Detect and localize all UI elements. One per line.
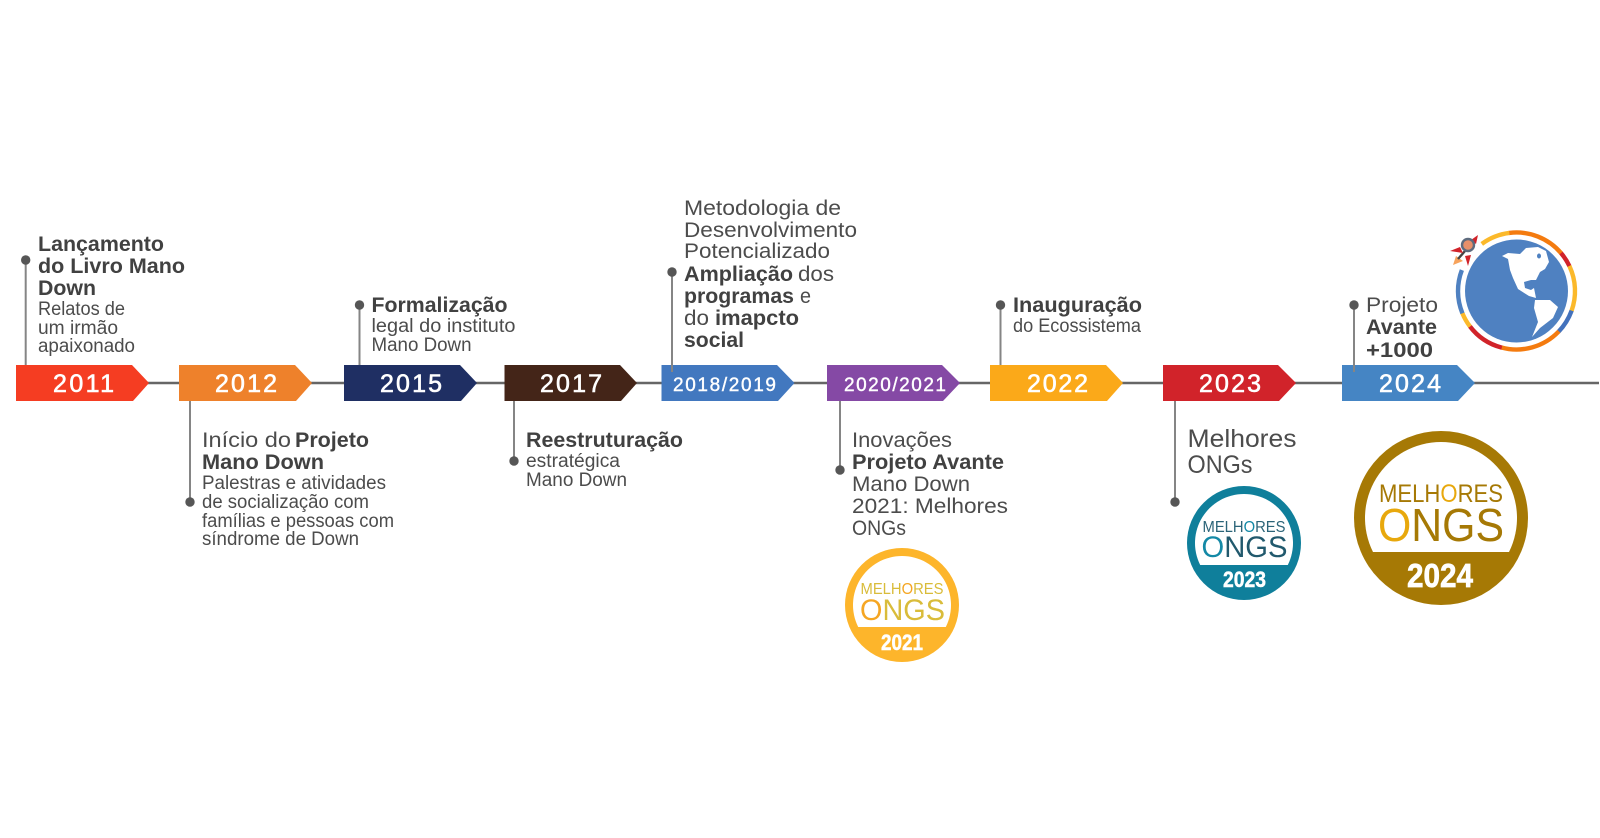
badge: Melhores ONGs 2021: ONGS [860,594,945,627]
panel: 2024 milestone [1342,208,1599,605]
text: inauguration: do Ecossistema [1013,316,1141,337]
text: methodology and expansion: programas [684,285,794,308]
text: innovations: Mano Down [852,473,970,496]
connector stem and dot [185,400,195,507]
text: Melhores ONGs: Melhores [1188,425,1296,453]
year arrow 2011 [16,365,149,401]
year arrow 2024 [1342,365,1475,401]
year arrow 2012 [179,365,312,401]
text: methodology and expansion: social [684,329,744,352]
year arrow 2015 [344,365,477,401]
badge: Melhores ONGs 2024: 2024 [1407,557,1474,594]
text: project start: Palestras e atividades [202,473,386,494]
connector stem and dot [21,255,30,366]
text: project start: Mano Down [202,451,324,474]
badge: Melhores ONGs 2024 [1354,431,1528,605]
badge: Melhores ONGs 2023 [1187,486,1301,600]
connector stem and dot [1349,300,1359,372]
text: inauguration: Inauguração [1013,294,1142,317]
text: project start: de socialização com [202,492,369,513]
text: methodology and expansion: imapcto [715,307,799,330]
text: methodology and expansion: Desenvolvimento [684,219,857,242]
text: book launch: do Livro Mano [38,255,185,278]
year arrow 2020/2021: 2020/2021 [844,375,946,396]
text: book launch: Lançamento [38,233,164,256]
text: formalization: legal do instituto [372,316,516,337]
year arrow 2023: 2023 [1199,370,1261,398]
text: innovations [852,429,1008,540]
badge: Melhores ONGs 2023: MELHORES [1202,519,1286,536]
text: project start: síndrome de Down [202,529,359,550]
text: restructuring: Mano Down [526,470,627,491]
text: restructuring: Reestruturação [526,429,683,452]
badge: Melhores ONGs 2021: 2021 [881,630,923,655]
text: methodology and expansion: do [684,307,709,330]
connector stem and dot [509,400,519,466]
connector stem and dot [1170,400,1180,507]
text: innovations: ONGs [852,517,906,540]
text: Projeto Avante +1000: Avante [1366,316,1437,339]
panel: 2011 milestone [16,233,185,401]
text: Projeto Avante +1000: +1000 [1366,339,1433,362]
year arrow 2011: 2011 [53,370,114,398]
year arrow 2017: 2017 [540,370,602,398]
badge: Melhores ONGs 2023: ONGS [1202,531,1288,564]
badge: Melhores ONGs 2021 [845,548,959,662]
panel: 2020/2021 milestone [827,365,1008,662]
text: innovations: 2021: Melhores [852,495,1008,518]
year arrow 2018/2019: 2018/2019 [673,375,776,396]
badge: Melhores ONGs 2024: ONGS [1378,499,1504,551]
panel: 2015 milestone [344,294,516,401]
text: project start [202,429,394,550]
text: Melhores ONGs: ONGs [1188,451,1252,479]
text: restructuring [526,429,683,491]
connector stem and dot [835,400,845,475]
text: project start: famílias e pessoas com [202,511,394,532]
text: formalization: Formalização [372,294,508,317]
text: Projeto Avante +1000: Projeto [1366,294,1438,317]
year arrow 2020/2021 [827,365,960,401]
year arrow 2023 [1163,365,1296,401]
panel: 2023 milestone [1163,365,1301,600]
icon: rocket [1450,235,1478,266]
year arrow 2017 [504,365,637,401]
year arrow 2022 [990,365,1123,401]
text: innovations: Projeto Avante [852,451,1004,474]
text: inauguration [1013,294,1142,337]
text: book launch: um irmão [38,318,118,339]
year arrow 2024: 2024 [1379,370,1441,398]
year arrow 2012: 2012 [215,370,277,398]
panel: 2012 milestone [179,365,394,550]
text: Projeto Avante +1000 [1366,294,1438,362]
text: book launch: Down [38,277,96,300]
badge: Melhores ONGs 2024: MELHORES [1379,480,1503,508]
year arrow 2018/2019 [662,365,794,401]
text: methodology and expansion: Ampliação [684,263,793,286]
text: project start: Projeto [295,429,369,452]
text: book launch: apaixonado [38,336,135,357]
text: methodology and expansion: Potencializado [684,240,830,263]
text: Melhores ONGs [1188,425,1296,479]
text: methodology and expansion: Metodologia de [684,197,841,220]
text: project start: Início do [202,429,291,452]
badge: Melhores ONGs 2023: 2023 [1223,567,1266,592]
text: methodology and expansion: dos [798,263,834,286]
text: methodology and expansion [684,197,857,352]
text: methodology and expansion: e [800,285,811,308]
text: book launch: Relatos de [38,299,125,320]
text: formalization: Mano Down [372,335,472,356]
text: innovations: Inovações [852,429,952,452]
text: book launch [38,233,185,357]
connector stem and dot [355,300,364,366]
panel: 2017 milestone [504,365,683,491]
panel: 2018/2019 milestone [662,197,857,401]
panel: 2022 milestone [990,294,1142,401]
year arrow 2022: 2022 [1027,370,1088,398]
text: restructuring: estratégica [526,451,620,472]
text: formalization [372,294,516,356]
connector stem and dot [996,300,1005,366]
year arrow 2015: 2015 [380,370,442,398]
icon: globe with coloured ring [1434,208,1599,374]
badge: Melhores ONGs 2021: MELHORES [860,581,944,598]
connector stem and dot [667,267,677,372]
